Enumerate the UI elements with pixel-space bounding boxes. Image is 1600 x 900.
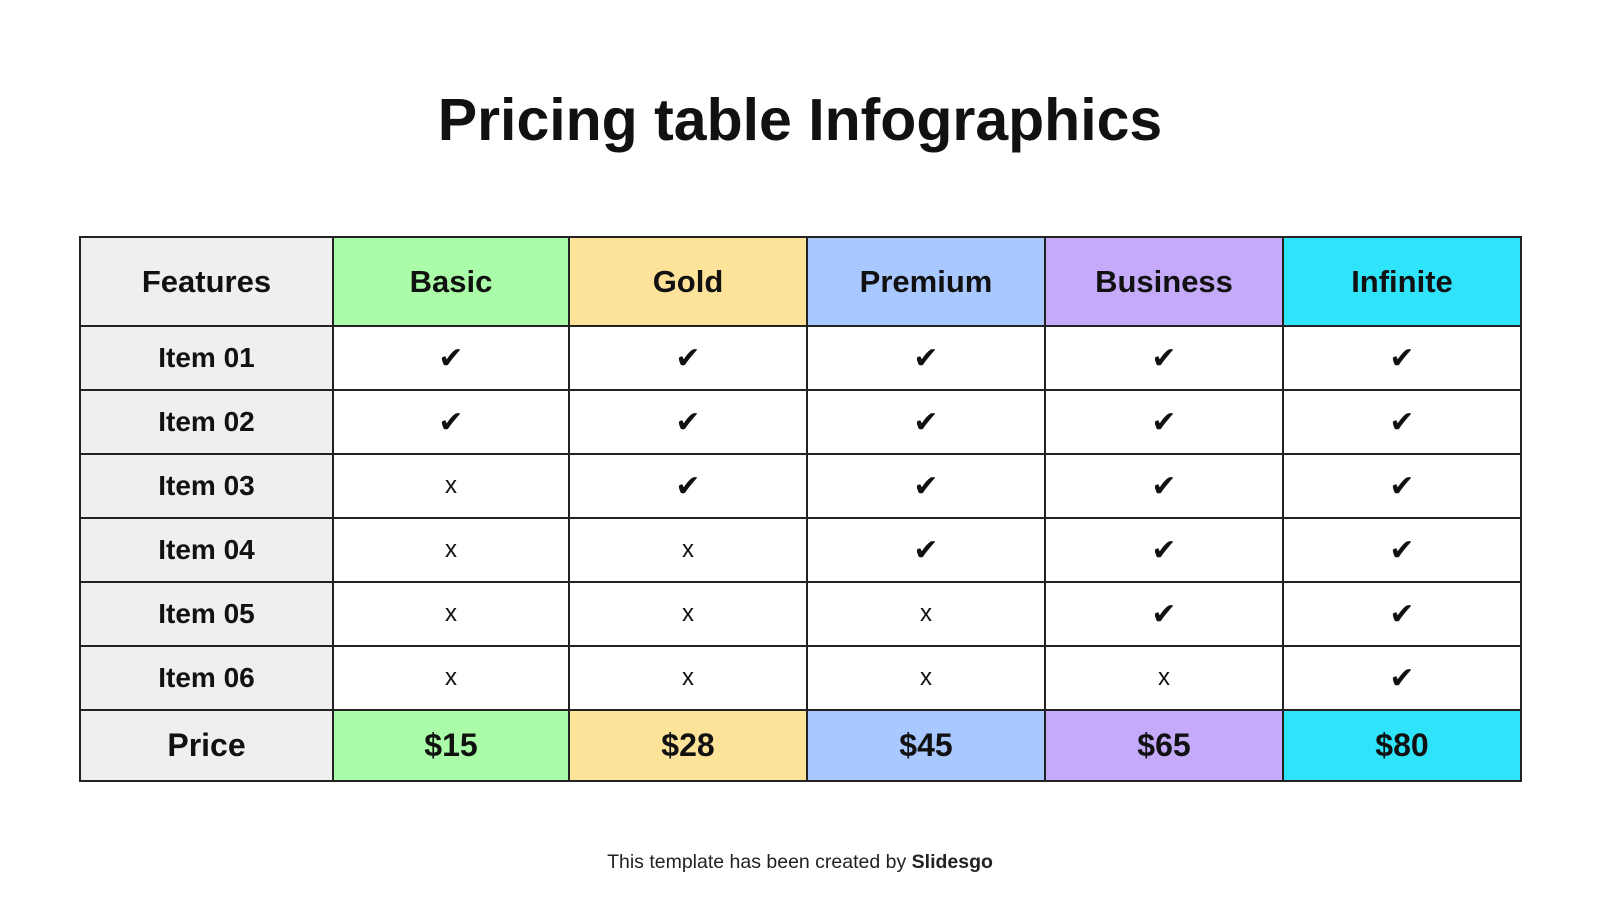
pricing table: $45	[899, 727, 953, 763]
pricing table: Basic	[410, 264, 492, 298]
pricing table: x	[1158, 664, 1170, 691]
pricing table: Business	[1095, 264, 1233, 298]
pricing table: x	[445, 664, 457, 691]
pricing table: ✔	[1389, 662, 1415, 694]
pricing table: Price	[167, 727, 246, 763]
pricing table: ✔	[1389, 470, 1415, 502]
pricing table: ✔	[1389, 534, 1415, 566]
pricing table: Item 05	[158, 598, 255, 629]
pricing table: x	[445, 536, 457, 563]
pricing table: Item 03	[158, 470, 255, 501]
pricing table: ✔	[438, 342, 464, 374]
footer credit: This template has been created by Slidesgo	[607, 851, 993, 873]
pricing table: ✔	[913, 342, 939, 374]
pricing table: ✔	[675, 406, 701, 438]
pricing table: ✔	[1151, 406, 1177, 438]
pricing table: ✔	[1151, 598, 1177, 630]
pricing table: x	[682, 536, 694, 563]
pricing table: ✔	[675, 342, 701, 374]
pricing table: Premium	[860, 264, 992, 298]
pricing table: Item 04	[158, 534, 255, 565]
pricing table: $65	[1137, 727, 1191, 763]
pricing table: ✔	[1389, 342, 1415, 374]
pricing table: $28	[661, 727, 715, 763]
pricing table: Item 06	[158, 662, 255, 693]
pricing table: x	[682, 600, 694, 627]
pricing table: Item 02	[158, 406, 255, 437]
pricing table: x	[682, 664, 694, 691]
pricing table: ✔	[1151, 534, 1177, 566]
pricing table: x	[920, 664, 932, 691]
pricing table: ✔	[1389, 406, 1415, 438]
pricing table: ✔	[913, 406, 939, 438]
title: Pricing table Infographics	[438, 87, 1162, 153]
pricing table: Features	[142, 264, 271, 298]
pricing table: x	[445, 600, 457, 627]
pricing table: $15	[424, 727, 478, 763]
pricing table: Item 01	[158, 342, 255, 373]
pricing table: ✔	[913, 534, 939, 566]
pricing table: ✔	[1151, 470, 1177, 502]
pricing table: $80	[1375, 727, 1429, 763]
pricing table: ✔	[1151, 342, 1177, 374]
pricing table: Gold	[653, 264, 723, 298]
pricing table: x	[920, 600, 932, 627]
pricing table: ✔	[675, 470, 701, 502]
pricing table: ✔	[438, 406, 464, 438]
pricing table: ✔	[913, 470, 939, 502]
pricing table: Infinite	[1351, 264, 1453, 298]
pricing table: x	[445, 472, 457, 499]
pricing table: ✔	[1389, 598, 1415, 630]
pricing table	[79, 236, 1522, 782]
